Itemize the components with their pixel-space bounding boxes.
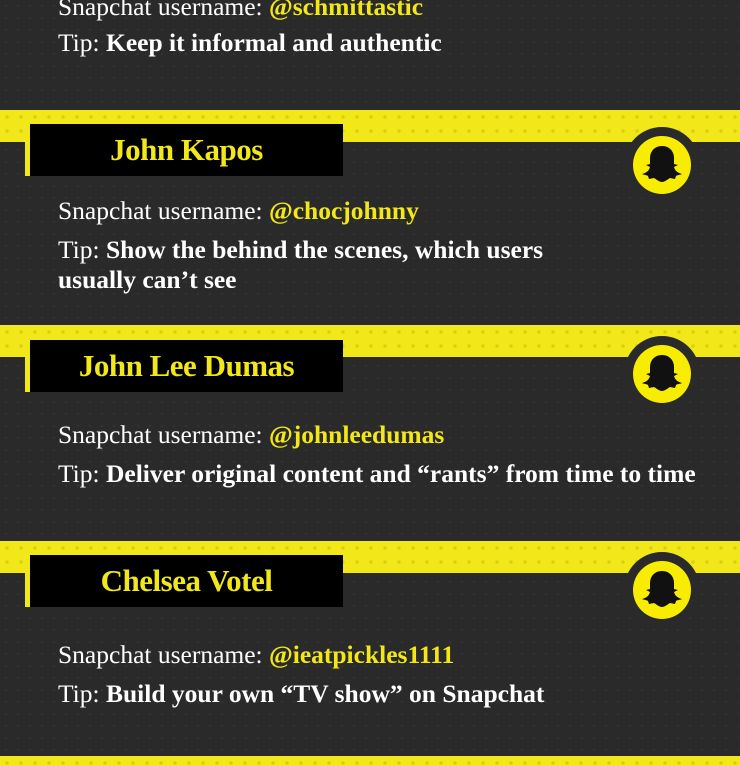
text: Dumas tip: Tip: Deliver original content and “rants” from time to time [58, 459, 696, 488]
band 1 [0, 110, 740, 142]
band 4 [0, 756, 740, 765]
text: Dumas username: Snapchat username: @johnleedumas [58, 420, 444, 449]
band 2 [0, 325, 740, 357]
heading: Chelsea Votel: Chelsea Votel [101, 563, 272, 598]
text: Kapos username: Snapchat username: @chocjohnny [58, 196, 419, 225]
heading: John Kapos: John Kapos [110, 132, 263, 167]
text: top tip: Tip: Keep it informal and authentic [58, 28, 442, 57]
text: Kapos tip: Tip: Show the behind the scenes, which users [58, 235, 543, 264]
icon: snapchat 2 [628, 336, 696, 403]
icon: snapchat 1 [629, 127, 692, 199]
text: Votel username: Snapchat username: @ieatpickles1111 [58, 640, 454, 669]
text: Kapos tip [58, 235, 543, 294]
text: Votel tip: Tip: Build your own “TV show” on Snapchat [58, 679, 544, 708]
heading: John Lee Dumas [25, 340, 343, 392]
heading: John Kapos [25, 124, 343, 176]
heading: Chelsea Votel [25, 555, 343, 607]
band 3 [0, 541, 740, 573]
heading: John Lee Dumas: John Lee Dumas [79, 348, 294, 383]
icon: snapchat 3 [628, 552, 696, 619]
text: Kapos tip: usually can’t see [58, 265, 236, 294]
